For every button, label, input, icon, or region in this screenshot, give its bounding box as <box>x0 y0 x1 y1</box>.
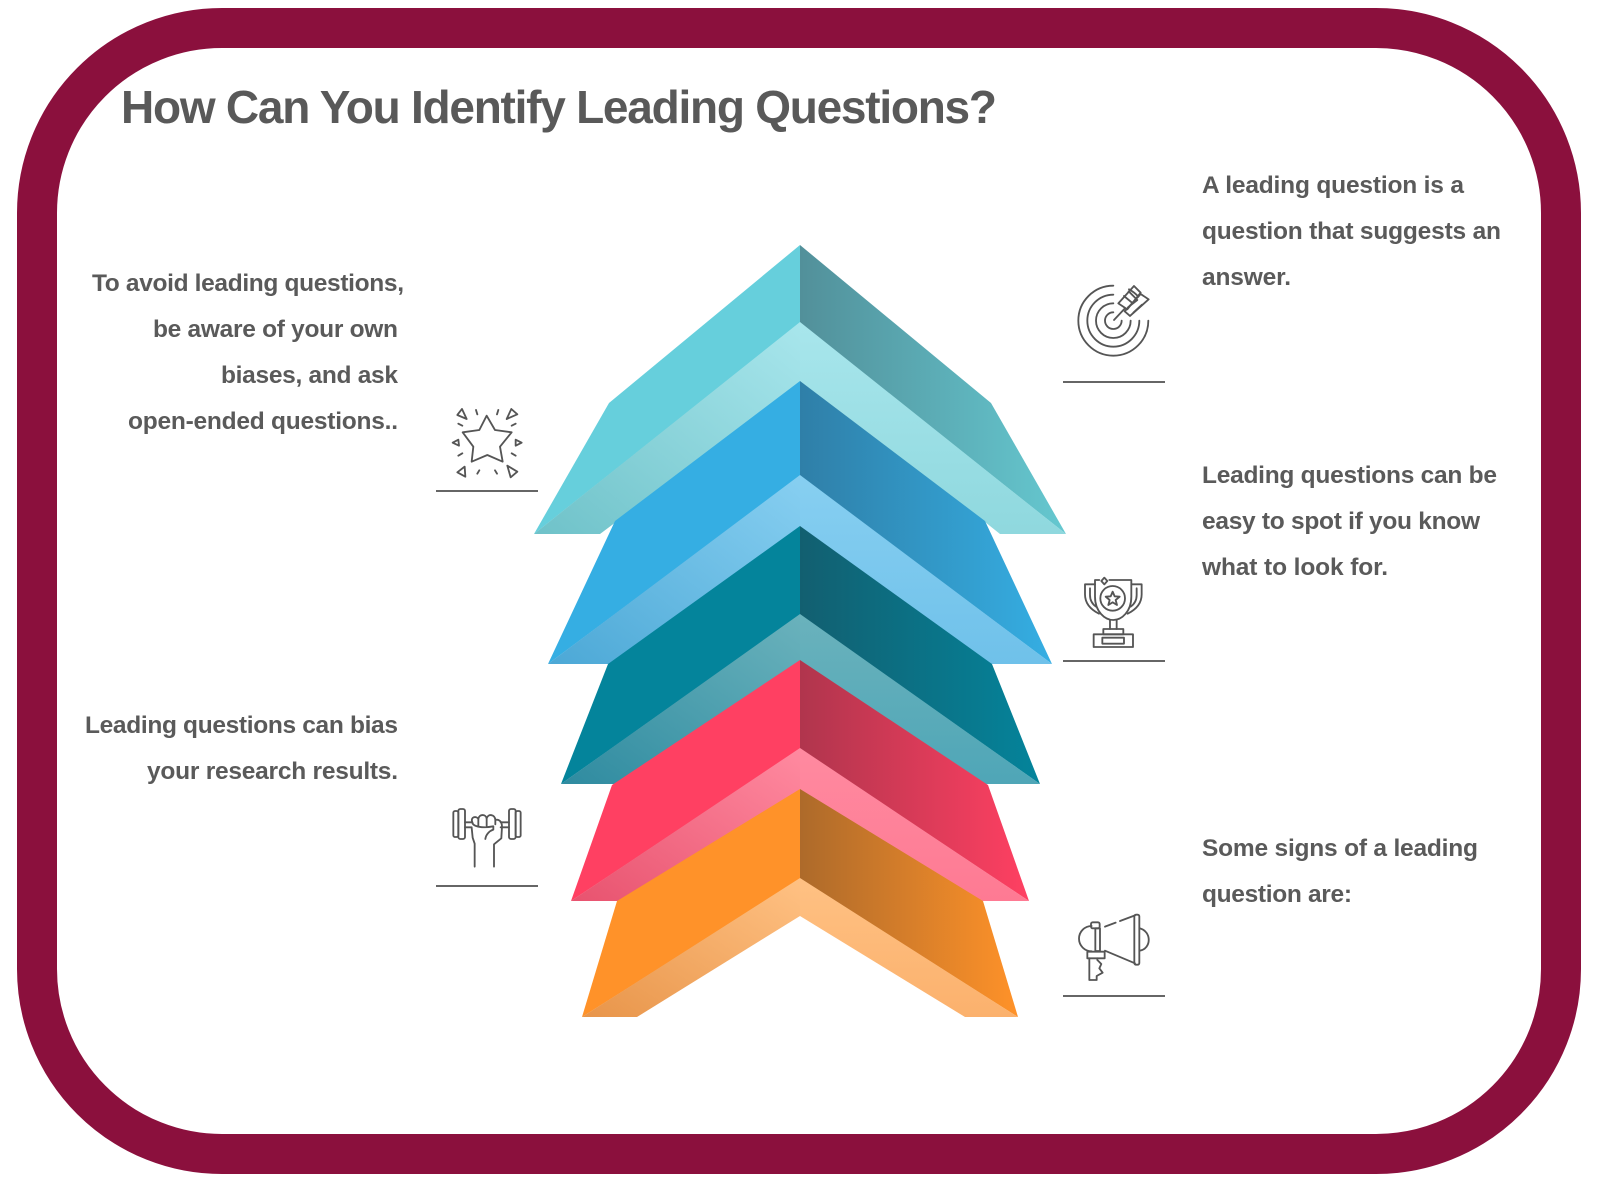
text: bias: your research results. <box>147 758 398 785</box>
text: signs <box>1202 835 1478 908</box>
text: easy to spot: what to look for. <box>1201 554 1388 581</box>
text: bias <box>85 712 398 785</box>
chevron: orange <box>582 789 1018 1017</box>
text: avoid: To avoid leading questions, <box>92 270 404 297</box>
rule: target <box>1063 381 1165 383</box>
icon: trophy <box>1085 578 1142 647</box>
text: easy to spot: Leading questions can be <box>1202 462 1497 489</box>
text: bias: Leading questions can bias <box>85 712 398 739</box>
text: easy to spot <box>1201 462 1497 581</box>
chevron: light teal <box>534 245 1066 534</box>
text: definition: question that suggests an <box>1202 218 1501 245</box>
chevron: dark teal <box>561 526 1040 784</box>
title: How Can You Identify Leading Questions? <box>121 81 997 133</box>
text: avoid: be aware of your own <box>153 316 398 343</box>
rule: star <box>436 490 538 492</box>
text: definition <box>1202 172 1501 291</box>
rule: dumbbell <box>436 885 538 887</box>
chevron: red <box>571 660 1029 901</box>
text: avoid: open-ended questions.. <box>128 408 398 435</box>
icon: dumbbell in fist <box>453 809 521 867</box>
text: signs: question are: <box>1202 881 1352 908</box>
icon: star with sparks <box>453 409 522 477</box>
text: avoid: biases, and ask <box>221 362 398 389</box>
text: avoid <box>92 270 404 435</box>
chevron stack <box>534 245 1066 1017</box>
icon: target with arrow <box>1078 286 1149 356</box>
chevron: blue <box>548 381 1052 664</box>
rule: trophy <box>1063 660 1165 662</box>
text: easy to spot: easy to spot if you know <box>1202 508 1481 535</box>
text: definition: answer. <box>1202 264 1291 291</box>
text: definition: A leading question is a <box>1202 172 1464 199</box>
icon: megaphone <box>1079 915 1149 980</box>
rule: megaphone <box>1063 995 1165 997</box>
text: signs: Some signs of a leading <box>1202 835 1478 862</box>
